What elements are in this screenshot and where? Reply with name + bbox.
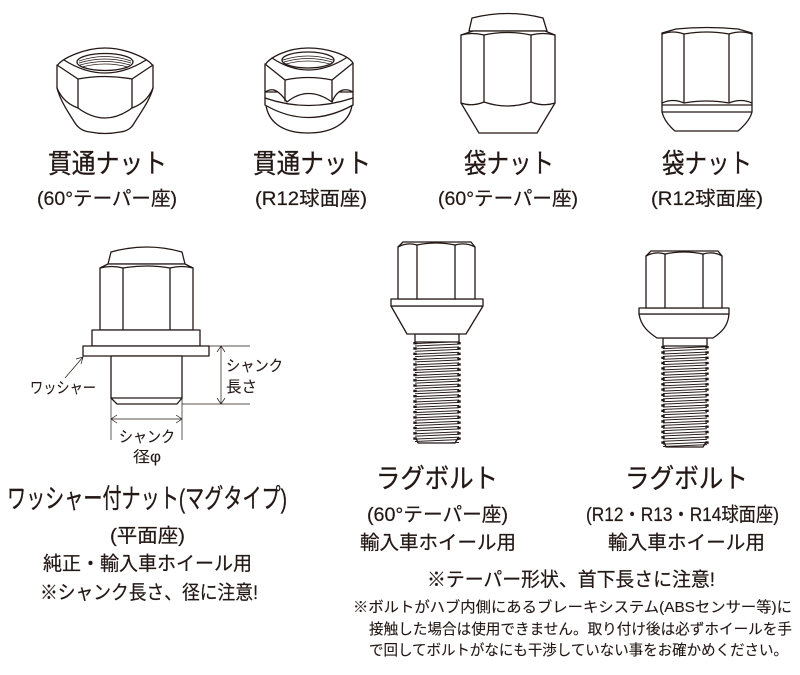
note: bolt contact with brake system: 接触した場合は使用できません。取り付け後は必ずホイールを手 [369, 621, 792, 638]
icon: closed-end nut, R12 spherical seat [662, 28, 752, 131]
title: through nut 2: 貫通ナット [253, 149, 371, 179]
text: genuine and imported car wheels: 純正・輸入車ホイール用 [43, 553, 252, 575]
icon: lug bolt, R12 R13 R14 spherical seat [639, 251, 729, 447]
title: lug bolt 2: ラグボルト [625, 464, 748, 494]
caption: 60 degree taper seat 2: (60°テーパー座) [438, 188, 578, 210]
icon: through nut, 60 degree taper seat [57, 48, 153, 134]
dimension: shank length [182, 346, 283, 404]
text: imported car wheels 2: 輸入車ホイール用 [608, 532, 765, 554]
warning: taper shape and neck length: ※テーパー形状、首下長さに注意! [427, 569, 715, 591]
title: closed-end nut 2: 袋ナット [662, 149, 752, 179]
dimension: shank diameter [111, 398, 182, 466]
icon: washer nut [83, 247, 209, 404]
title: washer nut (mag type): ワッシャー付ナット(マグタイプ) [7, 484, 287, 514]
caption: R12 R13 R14 spherical seat: (R12・R13・R14球面座) [586, 504, 779, 526]
caption: flat seat: (平面座) [110, 525, 185, 547]
dimension: shank length: シャンク [226, 357, 283, 375]
text: imported car wheels 1: 輸入車ホイール用 [360, 532, 516, 554]
note: bolt contact with brake system: ※ボルトがハブ内側にあるブレーキシステム(ABSセンサー等)に [353, 598, 792, 616]
diagram: washer nut with shank dimensions [30, 247, 283, 466]
note: bolt contact with brake system: で回してボルトがなにも干渉していない事をお確かめください。 [369, 642, 788, 659]
icon: lug bolt, 60 degree taper seat [391, 242, 483, 443]
dimension: shank diameter: 径φ [133, 448, 161, 466]
caption: R12 spherical seat 2: (R12球面座) [651, 188, 763, 210]
note: bolt contact with brake system [353, 598, 792, 659]
caption: R12 spherical seat 1: (R12球面座) [255, 188, 367, 210]
callout: washer label with arrow: ワッシャー [30, 380, 96, 397]
title: lug bolt 1: ラグボルト [376, 464, 498, 494]
caption: 60 degree taper seat 3: (60°テーパー座) [367, 504, 508, 526]
dimension: shank length: 長さ [226, 378, 257, 396]
title: closed-end nut 1: 袋ナット [464, 149, 554, 179]
icon: closed-end nut, 60 degree taper seat [461, 14, 555, 133]
title: through nut 1: 貫通ナット [48, 149, 167, 179]
caption: 60 degree taper seat 1: (60°テーパー座) [37, 188, 177, 210]
warning: shank length and diameter: ※シャンク長さ、径に注意! [40, 582, 258, 604]
icon: through nut, R12 spherical seat [265, 48, 353, 133]
callout: washer label with arrow [30, 357, 96, 397]
dimension: shank diameter: シャンク [119, 428, 175, 446]
